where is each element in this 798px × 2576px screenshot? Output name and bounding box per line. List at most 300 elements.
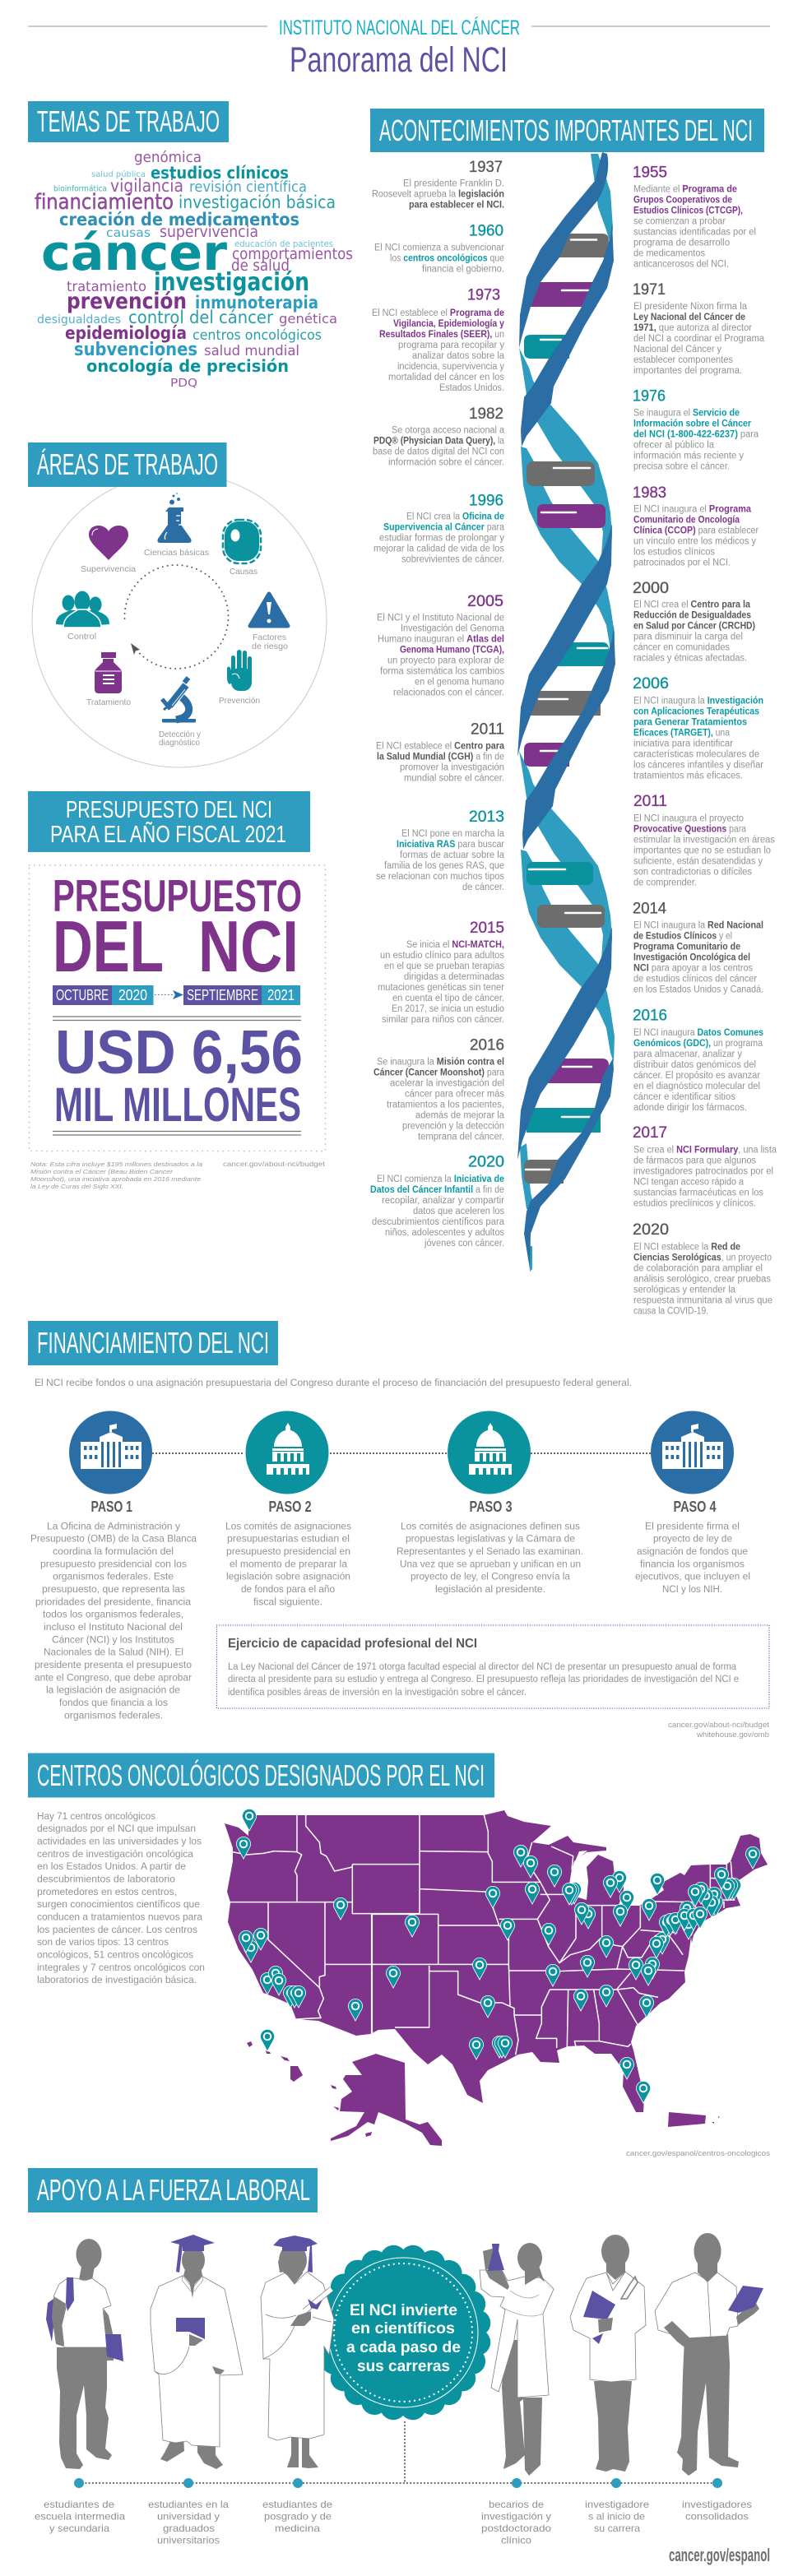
entry 1955: se comienzan a probar xyxy=(633,217,726,227)
centers paragraph: integrales y 7 centros oncológicos con xyxy=(37,1962,205,1973)
budget title: NCI xyxy=(198,906,299,987)
career stage labels: escuela intermedia xyxy=(35,2511,125,2523)
word cloud xyxy=(35,149,353,390)
entry 1973: El NCI establece el Programa de xyxy=(372,308,504,318)
centers paragraph xyxy=(37,1810,205,1985)
entry 1960: los centros oncológicos que xyxy=(390,253,504,263)
entry 2013: 2013 xyxy=(469,808,504,826)
entry 2005: Investigación del Genoma xyxy=(401,624,505,634)
entry 1937: para establecer el NCI. xyxy=(409,201,504,211)
word cloud: cáncer xyxy=(41,225,227,282)
step 2: fiscal siguiente. xyxy=(253,1596,322,1607)
step 3: proyecto de ley, el Congreso envía la xyxy=(411,1571,570,1582)
entry 2014: Investigación Oncológica del xyxy=(633,952,750,962)
word cloud: investigación xyxy=(154,268,309,297)
timeline left column xyxy=(370,159,505,1249)
entry 2013: de cáncer. xyxy=(462,883,504,892)
career stage labels: consolidados xyxy=(685,2511,749,2523)
entry 1971: del NCI a coordinar el Programa xyxy=(633,334,765,344)
word cloud: estudios clínicos xyxy=(151,163,289,183)
entry 1996 xyxy=(373,492,505,565)
callout: ejercicio de capacidad profesional: directa al presidente para su estudio y entrega al Congreso. El presupuesto refleja las prioridades de investigación del NCI e xyxy=(228,1673,739,1684)
panel: areas de trabajo xyxy=(28,442,327,767)
entry 2000: raciales y étnicas afectadas. xyxy=(633,654,747,664)
entry 1996: 1996 xyxy=(469,492,503,509)
heading: apoyo a la fuerza laboral xyxy=(28,2168,318,2212)
entry 1960 xyxy=(374,223,504,274)
step 2: PASO 2 xyxy=(268,1499,311,1515)
budget footnote: Misión contra el Cáncer (Beau Biden Cancer xyxy=(30,1168,174,1175)
entry 2006: para Generar Tratamientos xyxy=(633,718,747,728)
career stage labels: y secundaria xyxy=(49,2523,109,2534)
entry 1976: del NCI (1-800-422-6237) para xyxy=(633,429,759,439)
entry 2011 left: la Salud Mundial (CGH) a fin de xyxy=(377,753,504,762)
entry 2014: en los Estados Unidos y Canadá. xyxy=(633,985,763,994)
entry 1983 xyxy=(633,484,759,568)
entry 1955: de medicamentos xyxy=(633,249,705,259)
entry 1976: Información sobre el Cáncer xyxy=(633,419,751,429)
word cloud: control del cáncer xyxy=(128,308,273,327)
entry 2006 xyxy=(633,675,763,781)
word cloud: bioinformática xyxy=(53,184,107,194)
entry 2006: los cánceres infantiles y diseñar xyxy=(633,761,763,771)
step 4: NCI y los NIH. xyxy=(662,1583,722,1595)
step 1: Presupuesto (OMB) de la Casa Blanca xyxy=(30,1533,197,1545)
entry 1996: Supervivencia al Cáncer para xyxy=(383,523,505,533)
entry 1955: 1955 xyxy=(633,164,667,182)
heading: centros oncologicos: CENTROS ONCOLÓGICOS DESIGNADOS POR EL NCI xyxy=(37,1758,485,1792)
entry 1973: programa para recopilar y xyxy=(398,341,504,350)
map pins xyxy=(236,1809,760,2103)
entry 2017: investigadores patrocinados por el xyxy=(633,1167,773,1177)
entry 2016 right: cáncer e identificar sitios xyxy=(633,1092,735,1102)
centers paragraph: son de varios tipos: 13 centros xyxy=(37,1936,169,1948)
entry 2017: Se crea el NCI Formulary, una lista xyxy=(633,1146,777,1156)
entry 2020 left: 2020 xyxy=(468,1154,504,1171)
word cloud: creación de medicamentos xyxy=(59,210,299,229)
step 4: ejecutivos, que incluyen el xyxy=(635,1571,750,1582)
centers paragraph: conducen a tratamientos nuevos para xyxy=(37,1911,202,1923)
entry 2005: Humano inauguran el Atlas del xyxy=(378,635,504,645)
entry 2017 xyxy=(633,1124,777,1209)
career stage labels: estudiantes de xyxy=(44,2499,114,2510)
date range band xyxy=(53,985,300,1005)
word cloud: de salud xyxy=(231,257,290,275)
centers paragraph: los pacientes de cáncer. Los centros xyxy=(37,1924,197,1935)
heading: presupuesto del nci: PRESUPUESTO DEL NCI xyxy=(66,797,272,823)
icon: people, control xyxy=(56,591,109,642)
step 3: Los comités de asignaciones definen sus xyxy=(401,1520,580,1531)
entry 2011 left xyxy=(376,720,505,784)
budget source: cancer.gov/about-nci/budget xyxy=(223,1160,326,1168)
step 4: El presidente firma el xyxy=(645,1520,740,1531)
step 1: fondos que financia a los xyxy=(59,1697,168,1708)
entry 2013 xyxy=(376,808,505,892)
map of the united states xyxy=(225,1809,768,2146)
word cloud: salud mundial xyxy=(204,343,299,359)
entry 1973: mortalidad del cáncer en los xyxy=(388,373,504,382)
entry 2015: 2015 xyxy=(470,920,504,937)
step 1: presupuesto, que representa las xyxy=(42,1583,185,1595)
entry 2000: Reducción de Desigualdades xyxy=(633,611,751,621)
entry 2016 left: Se inaugura la Misión contra el xyxy=(377,1058,504,1068)
entry 2017: sustancias farmacéuticas en los xyxy=(633,1188,763,1198)
budget amount: USD 6,56 xyxy=(55,1017,303,1086)
entry 2005: Genoma Humano (TCGA), xyxy=(400,646,504,656)
word cloud: genética xyxy=(279,311,337,327)
icon: flask, ciencias basicas: Ciencias básicas xyxy=(144,548,209,558)
entry 2011 right: importantes que no se estudian lo xyxy=(633,846,771,855)
entry 2011 right: son contradictorias o difíciles xyxy=(633,867,752,877)
word cloud: inmunoterapia xyxy=(195,293,318,313)
entry 2015: dirigidas a determinadas xyxy=(404,972,504,982)
icon: hand, prevencion: Prevención xyxy=(219,696,260,706)
step 2: presupuesto presidencial en xyxy=(226,1545,350,1557)
step 1 xyxy=(30,1411,197,1721)
entry 1960: financia el gobierno. xyxy=(422,264,504,274)
entry 2000: 2000 xyxy=(633,580,669,597)
entry 2000 xyxy=(633,580,755,664)
entry 2005: relacionados con el cáncer. xyxy=(393,688,504,698)
entry 1960: El NCI comienza a subvencionar xyxy=(374,243,504,253)
entry 1983: Clínica (CCOP) para establecer xyxy=(633,526,759,535)
icon: warning triangle, factores de riesgo: de riesgo xyxy=(252,642,288,651)
entry 2011 right: de comprender. xyxy=(633,878,697,887)
entry 2016 left xyxy=(373,1036,505,1142)
icon: warning triangle, factores de riesgo: Factores xyxy=(253,632,286,642)
step 1: todos los organismos federales, xyxy=(43,1609,183,1620)
word cloud: comportamientos xyxy=(232,245,353,263)
icon: hand, prevencion xyxy=(219,650,260,706)
entry 2011 right: estimular la investigación en áreas xyxy=(633,835,775,845)
word cloud: epidemiología xyxy=(65,323,187,343)
entry 2016 left: 2016 xyxy=(470,1036,504,1054)
financing sources: whitehouse.gov/omb xyxy=(696,1730,769,1740)
entry 2006: Eficaces (TARGET), una xyxy=(633,729,731,739)
entry 2011 left: 2011 xyxy=(471,720,504,738)
entry 2016 right: 2016 xyxy=(633,1007,667,1024)
entry 2006: características moleculares de xyxy=(633,750,759,760)
entry 2017: estudios preclínicos y clínicos. xyxy=(633,1199,756,1209)
badge: el nci invierte: a cada paso de xyxy=(346,2339,461,2356)
entry 1973: incidencia, supervivencia y xyxy=(397,362,504,372)
entry 2011 right: suficiente, están desatendidas y xyxy=(633,856,763,866)
centers paragraph: designados por el NCI que impulsan xyxy=(37,1823,196,1834)
entry 2016 right: distribuir datos genómicos del xyxy=(633,1060,756,1070)
career stage labels: posgrado y de xyxy=(264,2511,332,2523)
step 1: presidente presenta el presupuesto xyxy=(35,1659,192,1670)
entry 2015: similar para niños con cáncer. xyxy=(382,1015,504,1025)
icon: microscope, deteccion y diagnostico: Detección y xyxy=(159,730,202,739)
budget amount: MIL MILLONES xyxy=(54,1078,301,1132)
word cloud: financiamiento xyxy=(35,190,174,215)
entry 1955: Mediante el Programa de xyxy=(633,185,737,195)
career stage labels: estudiantes en la xyxy=(148,2499,229,2510)
callout: ejercicio de capacidad profesional: La Ley Nacional del Cáncer de 1971 otorga facultad especial al director del NCI de presentar un presupuesto anual de forma xyxy=(228,1661,736,1672)
entry 1955: Grupos Cooperativos de xyxy=(633,196,732,206)
figure: established investigator xyxy=(655,2233,763,2476)
entry 1973: Estados Unidos. xyxy=(439,383,504,393)
heading: temas de trabajo: TEMAS DE TRABAJO xyxy=(37,104,220,138)
step 2: presupuestarias estudian el xyxy=(227,1533,350,1545)
step 1: coordina la formulación del xyxy=(53,1545,174,1557)
icon: cell, causas xyxy=(223,520,261,577)
entry 1973: analizar datos sobre la xyxy=(412,351,505,361)
step 3 xyxy=(397,1411,583,1595)
step 1: organismos federales. Este xyxy=(53,1571,174,1582)
centers paragraph: prometedores en estos centros, xyxy=(37,1886,177,1897)
entry 1971 xyxy=(633,281,765,376)
entry 2005: en el genoma humano xyxy=(415,678,504,688)
entry 2020 right xyxy=(633,1221,772,1316)
centers paragraph: descubrimientos de laboratorio xyxy=(37,1874,175,1885)
entry 2016 left: tratamientos a los pacientes, xyxy=(387,1100,504,1110)
centers paragraph: centros de investigación oncológica xyxy=(37,1848,193,1860)
entry 1983: Comunitario de Oncología xyxy=(633,515,740,525)
entry 2016 left: acelerar la investigación del xyxy=(390,1079,504,1089)
career stage labels: universitarios xyxy=(157,2535,220,2546)
entry 2020 left: niños, adolescentes y adultos xyxy=(385,1228,504,1238)
career timeline dots xyxy=(74,2478,722,2488)
entry 1973: 1973 xyxy=(467,287,500,304)
step 2: Los comités de asignaciones xyxy=(225,1520,351,1531)
entry 1983: patrocinados por el NCI. xyxy=(633,558,731,568)
entry 1971: Nacional del Cáncer y xyxy=(633,345,721,354)
financing sources: cancer.gov/about-nci/budget xyxy=(668,1721,769,1730)
dotted cycle arrow xyxy=(124,565,228,669)
entry 2014: de estudios clínicos del cáncer xyxy=(633,974,757,984)
entry 2014: Programa Comunitario de xyxy=(633,942,740,952)
entry 2006: tratamientos más eficaces. xyxy=(633,771,743,781)
career stage labels: s al inicio de xyxy=(588,2511,645,2523)
figure: research fellow xyxy=(480,2243,554,2476)
step 1: La Oficina de Administración y xyxy=(47,1520,181,1531)
entry 2017: 2017 xyxy=(633,1124,667,1142)
step 1: organismos federales. xyxy=(64,1709,163,1721)
title: panorama: Panorama del NCI xyxy=(290,40,508,80)
header: decorative rules and titles xyxy=(28,17,770,80)
entry 1982: base de datos digital del NCI con xyxy=(373,447,504,457)
budget amount xyxy=(54,1017,303,1132)
entry 2020 right: análisis serológico, crear pruebas xyxy=(633,1274,771,1284)
step 4: financia los organismos xyxy=(640,1558,745,1569)
entry 2011 left: mundial sobre el cáncer. xyxy=(404,774,504,784)
icon: bottle, tratamiento xyxy=(86,652,131,707)
career stage labels: medicina xyxy=(275,2523,320,2534)
budget title: DEL xyxy=(53,906,164,987)
panel: presupuesto xyxy=(28,791,326,1190)
entry 2011 right: El NCI inaugura el proyecto xyxy=(633,813,744,823)
step 4: asignación de fondos que xyxy=(637,1545,748,1557)
entry 1937 xyxy=(372,159,504,211)
dna helix xyxy=(517,152,615,1272)
word cloud: centros oncológicos xyxy=(193,327,322,343)
heading: financiamiento xyxy=(28,1321,278,1365)
word cloud: supervivencia xyxy=(160,223,258,241)
entry 1960: 1960 xyxy=(469,223,503,240)
entry 2014: NCI para apoyar a los centros xyxy=(633,963,753,973)
budget footnote: Nota: Esta cifra incluye $195 millones destinados a la xyxy=(30,1161,202,1168)
entry 2020 right: serológicas y entender la xyxy=(633,1285,736,1295)
word cloud: salud pública xyxy=(91,169,146,179)
step 2 xyxy=(225,1411,351,1607)
budget footnote xyxy=(30,1161,202,1190)
entry 2013: Iniciativa RAS para buscar xyxy=(397,840,504,850)
entry 2015: en cuenta el tipo de cáncer. xyxy=(392,994,504,1003)
entry 2016 left: prevención y la detección xyxy=(402,1122,504,1132)
panel: centros oncologicos xyxy=(28,1754,770,2158)
entry 1996: El NCI crea la Oficina de xyxy=(406,512,504,522)
step 2: de fondos para el año xyxy=(241,1583,335,1595)
step 1: la legislación de asignación de xyxy=(46,1684,180,1696)
entry 2016 left: cáncer para ofrecer más xyxy=(405,1090,504,1100)
step 3: Representantes y el Senado las examinan. xyxy=(397,1545,583,1557)
budget title: PRESUPUESTO xyxy=(53,870,302,921)
entry 1982: 1982 xyxy=(469,405,503,423)
entry 1971: establecer componentes xyxy=(633,355,733,365)
entry 1973: Vigilancia, Epidemiología y xyxy=(393,319,505,329)
word cloud: oncología de precisión xyxy=(86,356,289,376)
heading: areas de trabajo: ÁREAS DE TRABAJO xyxy=(37,447,218,481)
entry 2020 left: recopilar, analizar y compartir xyxy=(382,1196,504,1206)
entry 2014: 2014 xyxy=(633,901,666,918)
figure: student xyxy=(46,2239,123,2469)
entry 2020 right: respuesta inmunitaria al virus que xyxy=(633,1295,772,1305)
diagram circle xyxy=(32,473,327,767)
figure: early career investigator xyxy=(570,2235,646,2472)
word cloud: tratamiento xyxy=(67,279,146,294)
entry 1983: 1983 xyxy=(633,484,666,502)
entry 2016 right: El NCI inaugura Datos Comunes xyxy=(633,1028,763,1038)
entry 2017: NCI tengan acceso rápido a xyxy=(633,1178,745,1188)
entry 2013: se relacionan con muchos tipos xyxy=(376,872,504,882)
step 1: presupuesto presidencial con los xyxy=(40,1558,187,1569)
callout: ejercicio de capacidad profesional xyxy=(217,1625,769,1708)
entry 2011 right: 2011 xyxy=(633,793,667,810)
entry 2014: El NCI inaugura la Red Nacional xyxy=(633,920,763,930)
entry 2015: En 2017, se inicia un estudio xyxy=(392,1004,504,1014)
budget footnote: la Ley de Curas del Siglo XXI. xyxy=(30,1183,123,1190)
entry 1955: programa de desarrollo xyxy=(633,239,730,248)
budget title xyxy=(53,870,302,987)
entry 1976 xyxy=(633,387,759,471)
entry 2016 right: adonde dirigir los fármacos. xyxy=(633,1103,747,1113)
entry 2015: en el que se prueban terapias xyxy=(384,961,504,971)
heading: temas de trabajo xyxy=(28,101,229,142)
entry 2000: en Salud por Cáncer (CRCHD) xyxy=(633,622,755,632)
entry 2006: iniciativa para identificar xyxy=(633,739,733,749)
entry 2000: para disminuir la carga del xyxy=(633,632,743,642)
step 3: Una vez que se aprueban y unifican en un xyxy=(400,1558,581,1569)
step 1: ante el Congreso, que debe aprobar xyxy=(35,1671,192,1683)
entry 2006: El NCI inaugura la Investigación xyxy=(633,697,763,707)
entry 1982: PDQ® (Physician Data Query), la xyxy=(373,437,505,447)
entry 1971: Ley Nacional del Cáncer de xyxy=(633,313,745,322)
career stage labels: becarios de xyxy=(489,2499,544,2510)
budget dotted box xyxy=(30,865,326,1151)
entry 1996: sobrevivientes de cáncer. xyxy=(401,555,504,565)
entry 2020 left: datos que aceleren los xyxy=(413,1207,504,1216)
figure: university graduate xyxy=(151,2235,243,2469)
entry 2013: El NCI pone en marcha la xyxy=(401,829,505,839)
icon: flask, ciencias basicas xyxy=(144,493,209,558)
entry 2005: El NCI y el Instituto Nacional de xyxy=(377,614,504,623)
entry 2016 left: temprana del cáncer. xyxy=(418,1133,504,1142)
timeline right column xyxy=(633,164,777,1316)
entry 1983: los estudios clínicos xyxy=(633,547,715,557)
entry 2000: El NCI crea el Centro para la xyxy=(633,600,751,610)
step 3: PASO 3 xyxy=(469,1499,512,1515)
icon: microscope, deteccion y diagnostico: diagnóstico xyxy=(159,738,200,748)
career stage labels xyxy=(35,2499,752,2546)
centers paragraph: en los Estados Unidos. A partir de xyxy=(37,1860,186,1872)
entry 2020 right: 2020 xyxy=(633,1221,669,1239)
entry 1955: anticancerosos del NCI. xyxy=(633,260,729,270)
panel: financiamiento del nci xyxy=(28,1321,769,1740)
entry 2013: formas de actuar sobre la xyxy=(400,850,505,860)
entry 2020 left xyxy=(370,1154,505,1249)
entry 2020 left: jóvenes con cáncer. xyxy=(424,1239,504,1249)
panel: apoyo a la fuerza laboral xyxy=(28,2168,770,2565)
date range band: 2021 xyxy=(267,986,295,1003)
entry 2006: con Aplicaciones Terapéuticas xyxy=(633,707,759,717)
icon: heart, supervivencia: Supervivencia xyxy=(81,564,136,574)
badge: el nci invierte: en científicos xyxy=(351,2320,455,2337)
budget footnote: Moonshot), una iniciativa aprobada en 2016 mediante xyxy=(30,1175,201,1183)
word cloud: revisión científica xyxy=(189,178,307,196)
entry 1982 xyxy=(373,405,505,468)
entry 2020 right: El NCI establece la Red de xyxy=(633,1242,740,1252)
title: instituto: INSTITUTO NACIONAL DEL CÁNCER xyxy=(279,17,520,39)
entry 2011 left: promover la investigación xyxy=(400,763,504,773)
panel: temas de trabajo xyxy=(28,101,353,390)
step 1: incluso el Instituto Nacional del xyxy=(44,1621,183,1633)
word cloud: desigualdades xyxy=(37,313,121,327)
entry 2016 right: en el diagnóstico molecular del xyxy=(633,1082,760,1091)
entry 1937: 1937 xyxy=(469,159,503,176)
entry 2000: cáncer en comunidades xyxy=(633,643,730,653)
entry 2020 left: El NCI comienza la Iniciativa de xyxy=(377,1174,504,1184)
word cloud: investigación básica xyxy=(179,192,336,212)
centers paragraph: laboratorios de investigación básica. xyxy=(37,1974,197,1985)
centers paragraph: oncológicos, 51 centros oncológicos xyxy=(37,1949,193,1961)
map source: cancer.gov/espanol/centros-oncologicos xyxy=(626,2149,770,2158)
icon: heart, supervivencia xyxy=(81,526,136,574)
entry 1976: información más reciente y xyxy=(633,451,744,461)
entry 2011 right xyxy=(633,793,775,887)
icon: warning triangle, factores de riesgo xyxy=(250,594,288,651)
entry 2020 right: de colaboración para ampliar el xyxy=(633,1263,763,1273)
career stage labels: su carrera xyxy=(594,2523,640,2534)
entry 2006: 2006 xyxy=(633,675,669,693)
entry 2013: familia de los genes RAS, que xyxy=(384,861,504,871)
entry 2015: mutaciones genéticas sin tener xyxy=(378,983,504,993)
centers paragraph: surgen conocimientos científicos que xyxy=(37,1898,200,1910)
entry 2015: Se inicia el NCI-MATCH, xyxy=(406,940,504,950)
callout: ejercicio de capacidad profesional: Ejercicio de capacidad profesional del NCI xyxy=(228,1637,477,1651)
financing sources xyxy=(668,1721,769,1740)
entry 2016 right: Genómicos (GDC), un programa xyxy=(633,1039,763,1049)
entry 1976: 1976 xyxy=(633,387,666,405)
career stage labels: clínico xyxy=(501,2535,531,2546)
step 4: proyecto de ley de xyxy=(653,1533,732,1545)
entry 2005: 2005 xyxy=(467,593,503,610)
entry 1996: estudiar formas de prolongar y xyxy=(379,534,504,544)
entry 2020 left: descubrimientos científicos para xyxy=(372,1217,505,1227)
word cloud: genómica xyxy=(134,149,202,166)
entry 2014 xyxy=(633,901,763,994)
date range band: OCTUBRE xyxy=(56,986,109,1003)
